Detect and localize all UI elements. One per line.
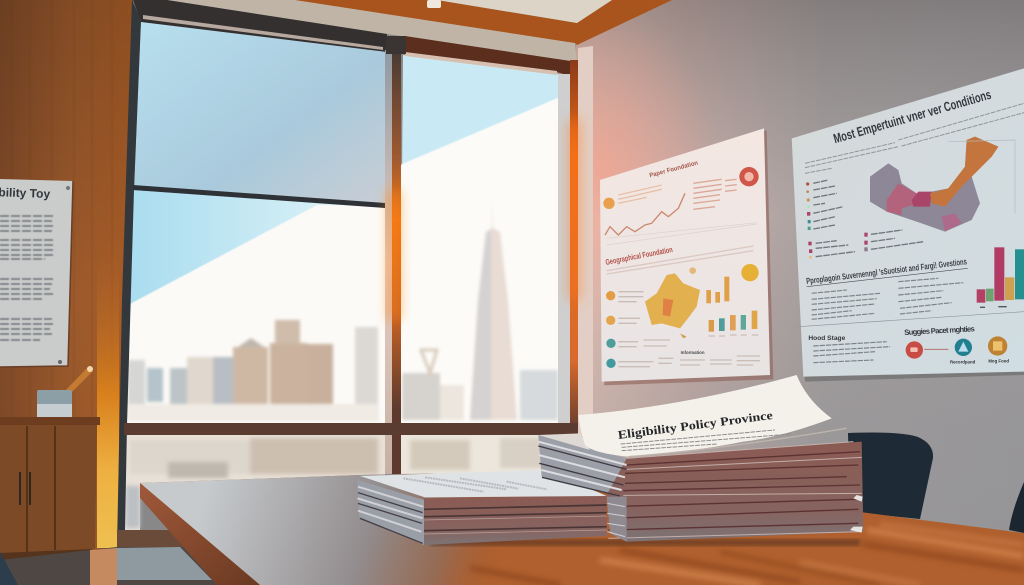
bar chart upper (706, 277, 729, 303)
right wall (480, 0, 1024, 540)
intro text lines (805, 103, 1024, 173)
window side reveal (578, 46, 593, 436)
sheet text lines (621, 430, 792, 451)
table edge (140, 483, 260, 585)
map regions (870, 137, 1015, 232)
bar chart lower (709, 311, 757, 332)
left icons (606, 291, 616, 368)
map legend (806, 180, 923, 259)
small stack top sheet (360, 470, 607, 497)
frame: centre mullion (385, 50, 393, 474)
window sill (117, 530, 187, 547)
icon: orange circle (603, 198, 615, 209)
large stack (538, 433, 863, 542)
wood streaks (430, 524, 1024, 585)
left wood wall (0, 0, 133, 585)
sky: upper left pane (134, 20, 385, 206)
frame: lower rail (124, 423, 578, 435)
lower panes (124, 434, 385, 530)
icon: yellow badge (741, 264, 759, 281)
top sheet (578, 375, 847, 457)
pen cup (37, 366, 93, 417)
sheet title: Eligibility Policy Province (617, 408, 774, 442)
city skyline (127, 192, 558, 421)
line chart (605, 193, 685, 235)
poster: conditions map (792, 68, 1024, 382)
floor (0, 547, 225, 585)
window view (124, 20, 560, 530)
table (140, 472, 1024, 585)
poster: paper foundation (600, 128, 773, 385)
document stacks (357, 375, 863, 545)
frame: top left (133, 0, 387, 52)
sunlight glow (388, 120, 580, 320)
poster heading middle: Geographical Foundation (605, 245, 674, 267)
process icons (906, 336, 1009, 364)
small stack (357, 470, 607, 545)
cabinet (0, 417, 100, 562)
window frame (117, 0, 593, 547)
process icons: Mog Food (988, 359, 1009, 364)
stage block (808, 335, 890, 363)
stage block: Hood Stage (808, 335, 846, 342)
left poster (0, 179, 73, 367)
sunlit wall strip (97, 240, 119, 548)
poster heading top: Paper Foundation (649, 160, 699, 179)
bullet text (812, 278, 963, 319)
process icons: Recordpand (950, 359, 976, 364)
map (645, 273, 700, 338)
sky: right pane (400, 55, 560, 425)
frame: left (117, 0, 141, 547)
light beam (125, 205, 385, 425)
ceiling (70, 0, 672, 62)
poster text lines (618, 292, 760, 367)
frame: mid rail (133, 185, 385, 208)
poster small label: Information (681, 350, 705, 355)
icon: red badge (739, 167, 759, 186)
frame: right (558, 74, 570, 424)
process heading: Suggies Pacet mghties (904, 324, 975, 337)
sky: lower left pane (125, 190, 385, 425)
left poster text lines (0, 216, 55, 340)
bar chart (798, 247, 1024, 327)
frame: top right (405, 36, 577, 76)
chairs (848, 432, 1024, 533)
